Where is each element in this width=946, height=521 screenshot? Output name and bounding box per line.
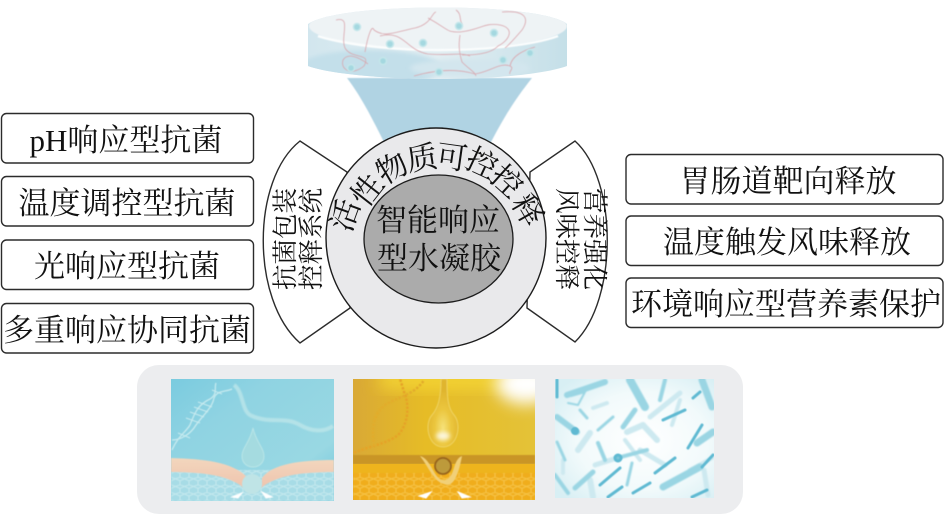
ring text: 释 <box>505 188 550 232</box>
label: antibacterial packaging: 抗菌包装 <box>271 188 300 290</box>
outer ring: controlled release of active substances <box>326 128 546 348</box>
wave ribbon <box>234 385 333 430</box>
ring text: 活 <box>324 195 367 236</box>
droplet <box>428 379 458 447</box>
box: light responsive: 光响应型抗菌 <box>34 249 220 284</box>
hex tissue <box>171 470 334 501</box>
image: skin and blue droplet <box>171 379 334 501</box>
pore and nucleus <box>420 456 462 485</box>
ring text <box>324 138 550 236</box>
inner core: smart responsive hydrogel: 智能响应 <box>376 203 500 238</box>
box: gastrointestinal targeted <box>626 154 943 204</box>
white arrows <box>419 492 470 498</box>
box: pH responsive <box>2 114 254 163</box>
box: environment responsive nutrient: 环境响应型营养素保护 <box>631 287 941 322</box>
ring text: 控 <box>460 141 503 186</box>
box: temperature controlled: 温度调控型抗菌 <box>18 186 236 221</box>
panel: right fan nutrition and flavour <box>527 141 609 342</box>
ring text: 可 <box>434 138 470 177</box>
box: temperature triggered flavour: 温度触发风味释放 <box>663 225 911 260</box>
box: pH responsive: pH响应型抗菌 <box>30 123 222 158</box>
DNA helix <box>172 383 232 450</box>
ring text: 物 <box>370 146 414 191</box>
box: multi-responsive <box>2 304 254 353</box>
honeycomb <box>353 464 535 474</box>
light cone below hydrogel disc <box>347 78 532 150</box>
box: gastrointestinal targeted: 胃肠道靶向释放 <box>680 164 896 199</box>
box: multi-responsive: 多重响应协同抗菌 <box>3 313 251 348</box>
panel: left fan antibacterial release <box>263 141 350 343</box>
dark rods <box>557 380 713 497</box>
label: nutrition and flavour: 营养强化 <box>580 188 609 290</box>
dna dots <box>354 379 424 453</box>
polymer network fibres <box>336 10 535 76</box>
top glow <box>376 379 498 394</box>
pale rods <box>563 393 712 497</box>
label: nutrition and flavour: 风味控释 <box>552 188 581 290</box>
ring text: 质 <box>404 139 440 178</box>
droplet <box>242 428 264 467</box>
cell cluster <box>242 474 262 494</box>
right list: release types <box>626 154 943 328</box>
hydrogel disc illustration <box>308 8 567 79</box>
label: antibacterial packaging: 控释系统 <box>297 188 326 290</box>
white arrows <box>232 492 272 498</box>
box: temperature controlled <box>2 176 254 226</box>
box: temperature triggered flavour <box>626 216 943 266</box>
ring text: 性 <box>344 167 391 213</box>
box: environment responsive nutrient <box>626 278 943 328</box>
brown layer <box>353 455 535 464</box>
left list: antibacterial types <box>2 114 254 353</box>
skin layers <box>171 458 334 488</box>
label: nutrition and flavour <box>552 188 609 290</box>
image: golden droplet <box>353 379 535 500</box>
medium rods <box>555 380 713 493</box>
label: antibacterial packaging <box>271 188 326 290</box>
inner core: smart responsive hydrogel: 型水凝胶 <box>377 241 502 276</box>
ring text: 控 <box>483 158 530 205</box>
active substance particles <box>348 22 534 76</box>
panel: bottom image strip <box>137 365 743 514</box>
box: light responsive <box>2 240 254 290</box>
inner core: smart responsive hydrogel <box>364 175 513 303</box>
image: bacteria <box>555 379 714 498</box>
white highlight <box>484 379 535 416</box>
